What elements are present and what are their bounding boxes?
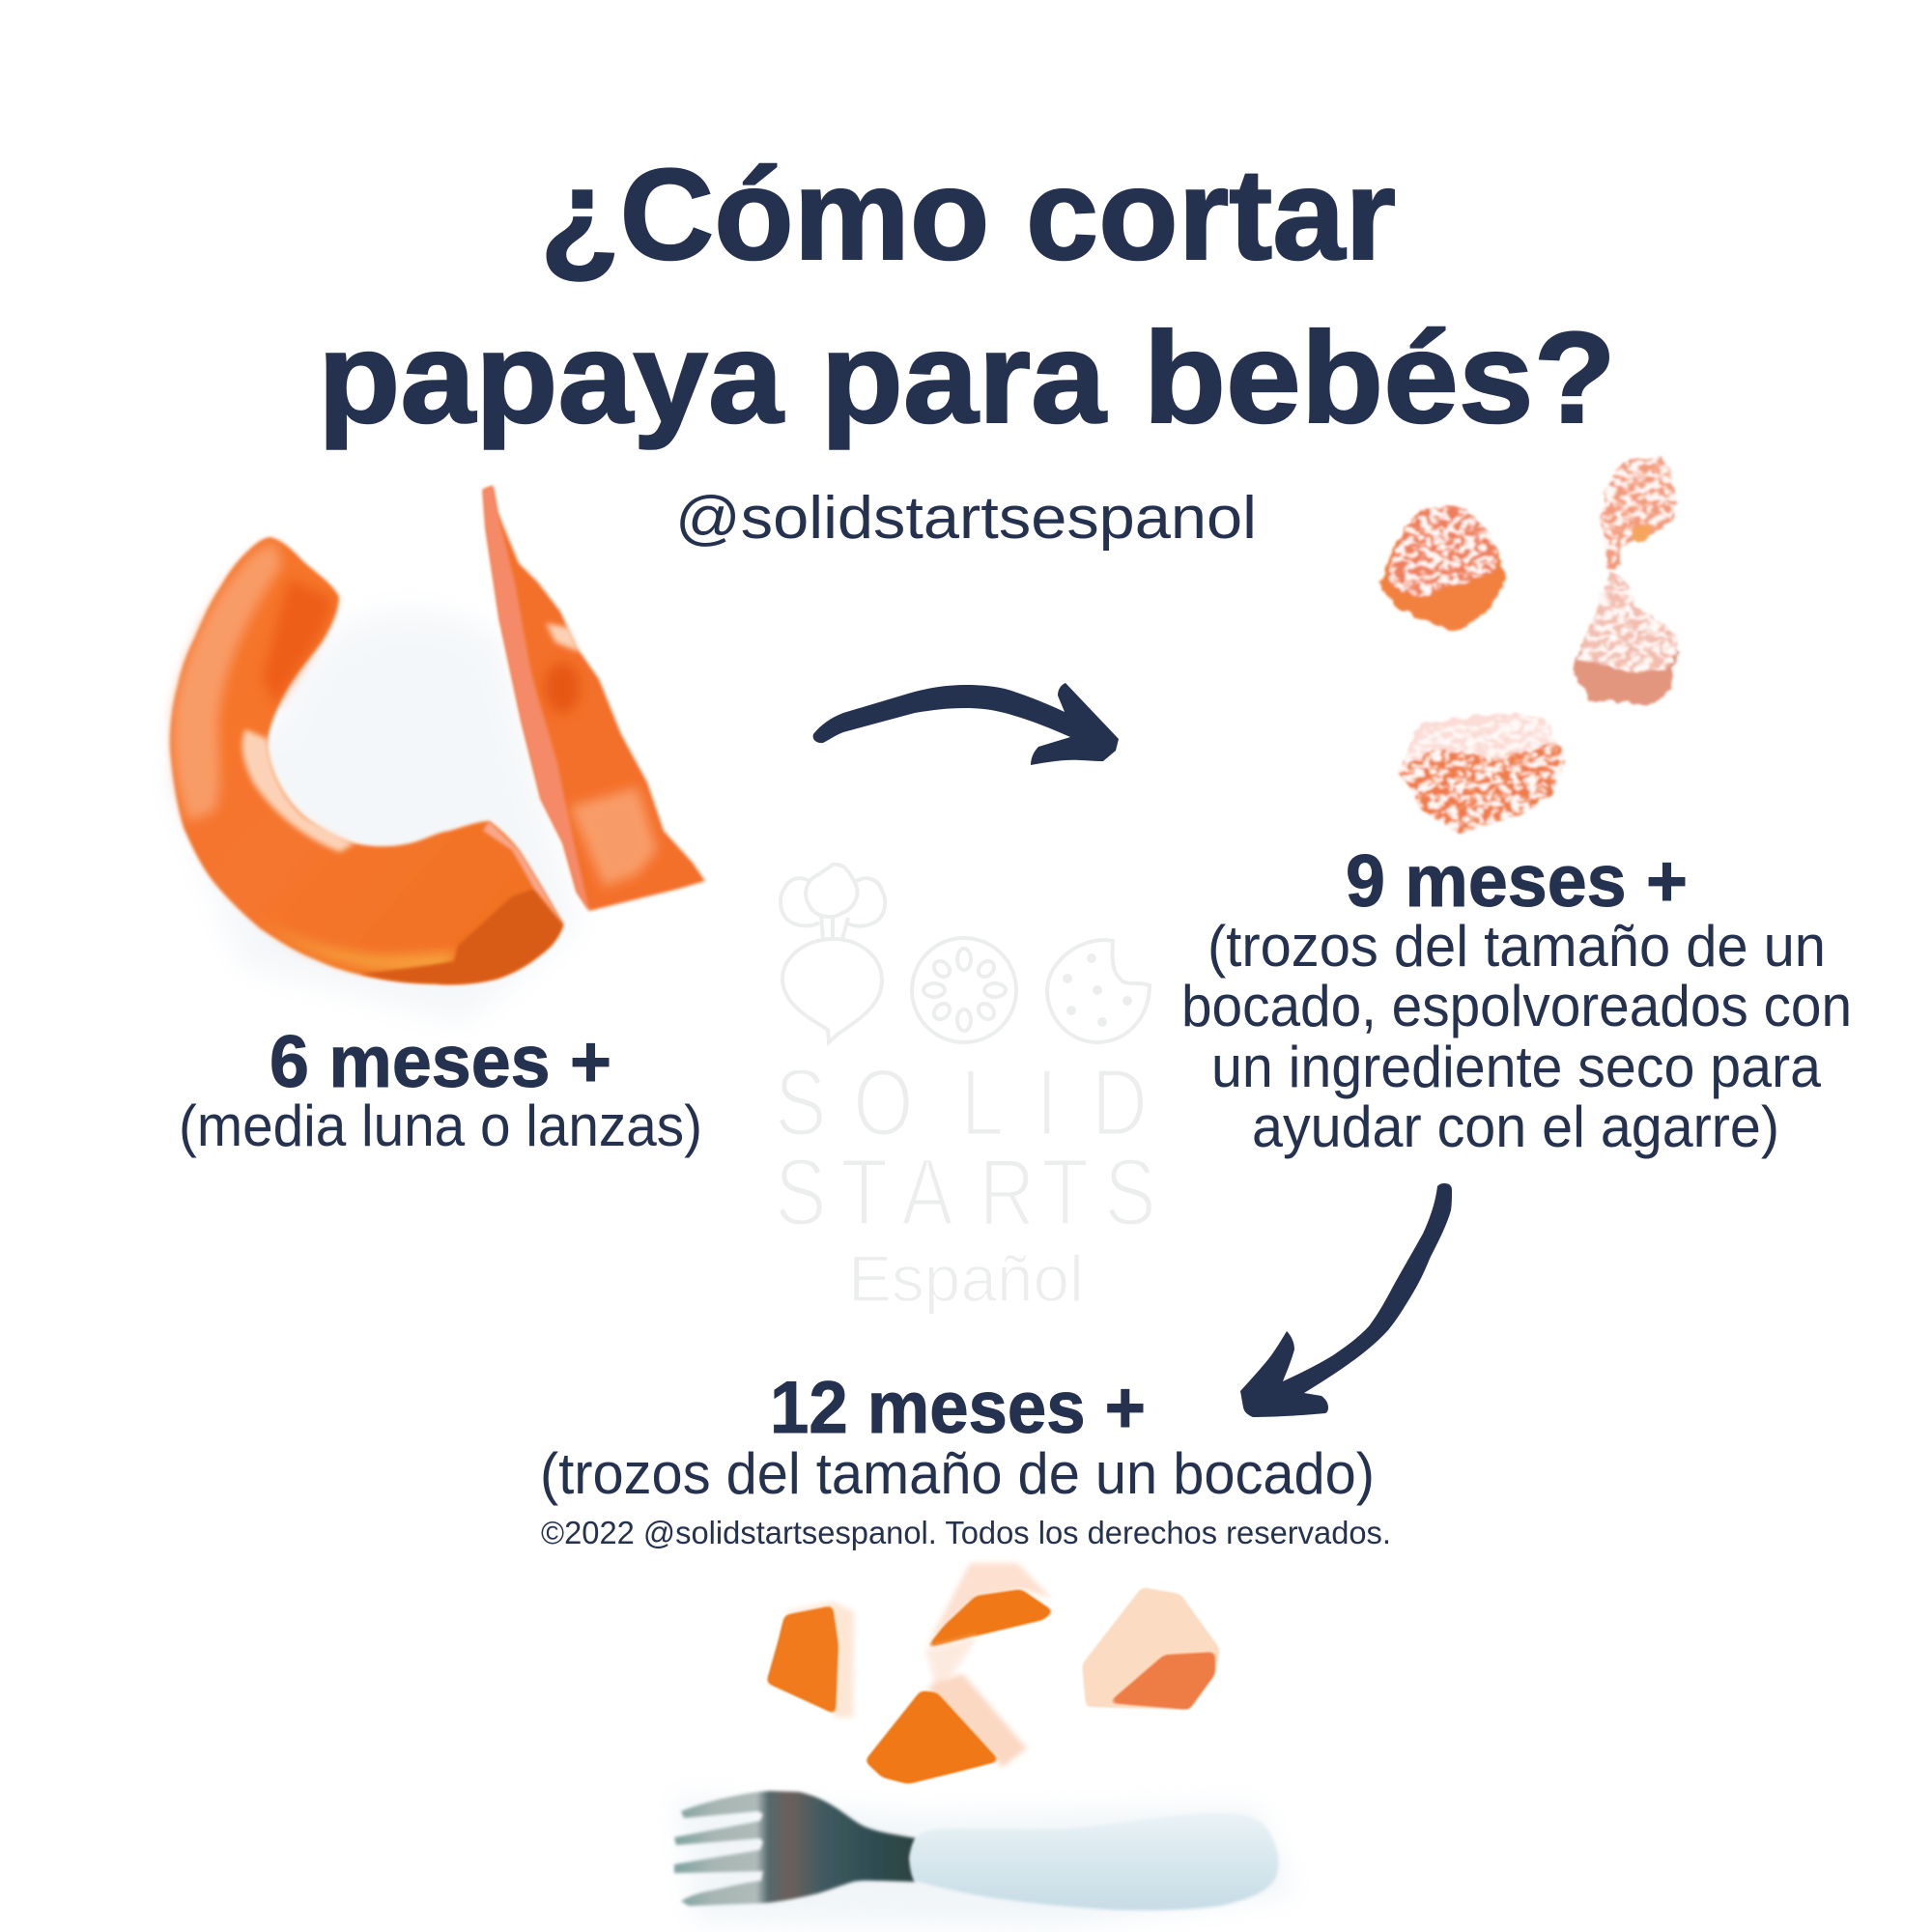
coconut-dusted papaya cubes [1381, 458, 1679, 833]
piece B [925, 1563, 1054, 1686]
watermark logo [775, 865, 1156, 1316]
piece A [766, 1602, 854, 1718]
piece D [1082, 1587, 1220, 1710]
copyright: ©2022 @solidstartsespanol. Todos los derechos reservados. [541, 1515, 1391, 1550]
arrow: 6 to 9 months [813, 683, 1119, 765]
fork [674, 1791, 1294, 1927]
label: 9 meses: bocado, espolvoreados con [1181, 974, 1852, 1038]
watermark logo: Español [848, 1242, 1084, 1316]
label: 9 meses: (trozos del tamaño de un [1208, 914, 1826, 979]
watermark logo: STARTS [775, 1139, 1156, 1245]
label: 6 meses: 6 meses + [270, 1021, 611, 1103]
label: 12 meses [540, 1367, 1375, 1506]
icon: beet [781, 865, 885, 1042]
fork handle [910, 1813, 1279, 1911]
label: 9 meses [1181, 840, 1852, 1159]
title: ¿Cómo cortar [540, 143, 1396, 287]
handle text: @solidstartsespanol [675, 485, 1257, 552]
lance slice [483, 486, 705, 911]
title [318, 143, 1616, 450]
papaya bite-size pieces [766, 1563, 1220, 1784]
label: 6 meses: (media luna o lanzas) [179, 1094, 702, 1158]
label: 9 meses: un ingrediente seco para [1211, 1035, 1822, 1099]
cube 3 [1573, 572, 1679, 705]
title: papaya para bebés? [318, 306, 1616, 450]
cube 1 [1381, 506, 1504, 630]
papaya half moon and lance [164, 486, 705, 1024]
icon: cookie [1047, 940, 1150, 1042]
cube 2 [1600, 458, 1676, 570]
cube 4 [1398, 712, 1565, 833]
arrow: 9 to 12 months [1240, 1183, 1452, 1417]
fork head and tines [674, 1791, 916, 1906]
label: 12 meses: 12 meses + [770, 1367, 1146, 1449]
half moon slice [170, 537, 563, 984]
label: 9 meses: 9 meses + [1346, 840, 1688, 923]
icon: tomato slice [912, 938, 1016, 1042]
label: 6 meses [179, 1021, 702, 1158]
label: 9 meses: ayudar con el agarre) [1252, 1094, 1779, 1159]
piece C [865, 1674, 1027, 1784]
label: 12 meses: (trozos del tamaño de un bocado) [540, 1441, 1375, 1506]
watermark logo: SOLID [775, 1049, 1148, 1155]
